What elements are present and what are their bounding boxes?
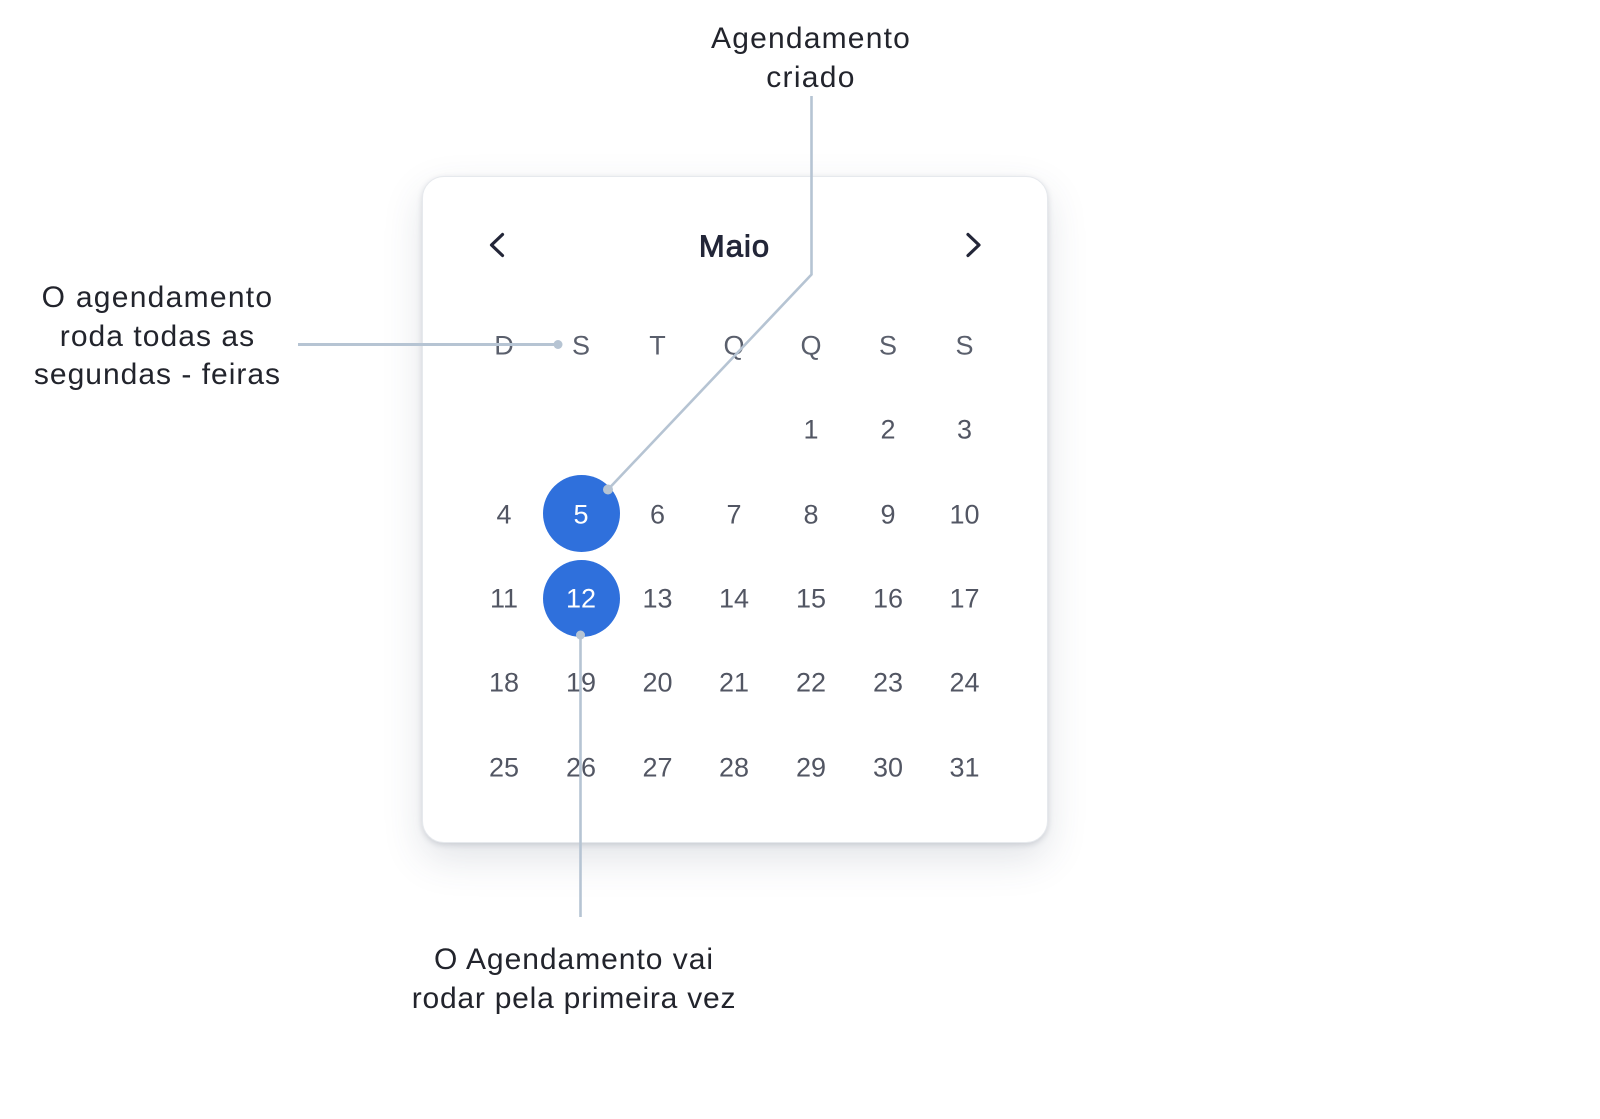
weekday headers [494, 330, 974, 360]
calendar days: 26 [566, 752, 596, 782]
arrow: line to day 5 [603, 96, 812, 494]
highlighted day 12 [542, 560, 620, 636]
arrow: line to Monday header [298, 340, 562, 349]
calendar days: 22 [796, 668, 826, 698]
calendar days: 21 [719, 668, 749, 698]
calendar days: 16 [873, 584, 903, 614]
weekday headers: S [572, 330, 590, 360]
calendar days: 13 [642, 584, 673, 614]
calendar days: 28 [719, 752, 749, 782]
weekday headers: Q [723, 330, 745, 360]
callout: schedule created [711, 22, 911, 94]
callout: first run: rodar pela primeira vez [412, 982, 736, 1014]
icon: previous month arrow [490, 232, 504, 258]
calendar days: 31 [949, 752, 980, 782]
calendar days: 9 [880, 500, 896, 530]
highlighted day 5 [542, 474, 620, 552]
calendar days: 5 [573, 500, 589, 530]
calendar days: 14 [719, 584, 749, 614]
calendar days: 17 [949, 584, 980, 614]
weekday headers: T [649, 330, 666, 360]
calendar days: 1 [803, 414, 819, 444]
calendar days: 18 [489, 668, 519, 698]
callout: schedule created: Agendamento [711, 22, 911, 55]
calendar days: 20 [642, 668, 673, 698]
callout: first run [412, 943, 736, 1014]
calendar days: 3 [957, 414, 972, 444]
calendar days: 25 [489, 752, 519, 782]
weekday headers: Q [800, 330, 822, 360]
icon: next month arrow [966, 232, 981, 258]
calendar days: 30 [873, 752, 903, 782]
weekday headers: S [879, 330, 897, 360]
callout: first run: O Agendamento vai [434, 943, 714, 976]
calendar days: 27 [642, 752, 673, 782]
weekday headers: D [494, 330, 514, 360]
calendar days: 4 [496, 500, 512, 530]
panel: calendar card [422, 176, 1048, 843]
callout: runs every Monday: segundas - feiras [34, 358, 281, 391]
calendar days [489, 414, 980, 782]
weekday headers: S [955, 330, 974, 360]
callout: runs every Monday [34, 281, 281, 391]
callout: schedule created: criado [766, 60, 856, 94]
calendar days: 10 [949, 500, 980, 530]
calendar days: 11 [490, 584, 518, 614]
callout: runs every Monday: O agendamento [42, 281, 273, 314]
calendar days: 15 [796, 584, 826, 614]
calendar days: 23 [873, 668, 903, 698]
calendar days: 8 [803, 500, 819, 530]
calendar days: 29 [796, 752, 826, 782]
calendar days: 24 [949, 668, 980, 698]
calendar days: 7 [726, 500, 742, 530]
calendar days: 19 [566, 668, 596, 698]
calendar days: 12 [566, 584, 596, 614]
calendar days: 2 [880, 414, 896, 444]
calendar days: 6 [650, 500, 665, 530]
heading: month: Maio [699, 228, 770, 263]
callout: runs every Monday: roda todas as [60, 320, 255, 352]
arrow: line to day 12 [576, 630, 585, 917]
